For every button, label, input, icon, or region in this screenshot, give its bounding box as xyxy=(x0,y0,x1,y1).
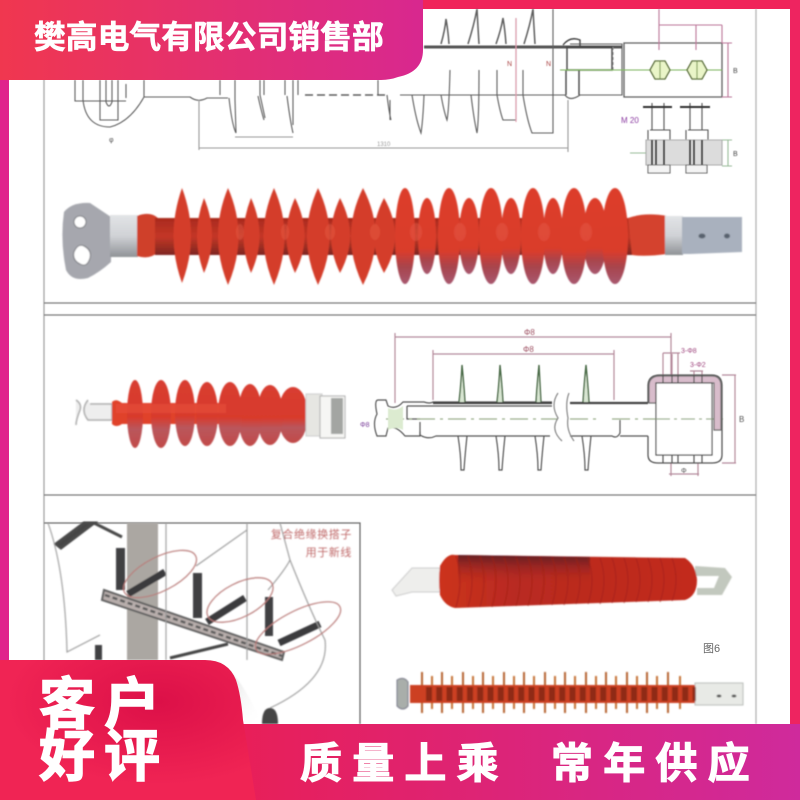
top shading xyxy=(458,555,590,585)
metal end xyxy=(695,683,743,705)
angled insulators xyxy=(128,572,320,643)
field installation photo: 用于新线 xyxy=(306,545,352,559)
bottom slogan left: 质量上乘 xyxy=(300,740,509,787)
shaft xyxy=(155,218,635,255)
technical drawing: middle insulator: 3-Φ2 xyxy=(690,362,706,369)
utility pole xyxy=(127,523,158,660)
centre line xyxy=(386,418,725,420)
top banner xyxy=(0,0,423,80)
field installation photo xyxy=(48,523,352,724)
technical drawing: middle insulator: Φ8 xyxy=(524,328,535,337)
sheds on the left half xyxy=(174,188,395,285)
end ball xyxy=(374,400,552,436)
customer praise badge xyxy=(0,660,256,800)
shaft outline xyxy=(144,80,298,133)
red loops xyxy=(117,541,348,664)
right collar xyxy=(628,214,667,256)
weather sheds xyxy=(174,188,628,285)
right fitting xyxy=(695,566,732,595)
technical drawing: top insulator xyxy=(75,9,738,173)
section with bolts xyxy=(648,103,708,140)
bottom slogan right: 常年供应 xyxy=(551,740,760,787)
left fitting xyxy=(392,568,440,596)
metal eye plate xyxy=(62,203,111,279)
metal neck xyxy=(110,215,138,257)
red shaft xyxy=(112,400,300,426)
technical drawing: top insulator: M 20 xyxy=(621,116,639,125)
left eye fitting xyxy=(83,80,144,127)
technical drawing: top insulator: B xyxy=(733,68,738,75)
bottom banner xyxy=(240,724,800,800)
dimension lines xyxy=(395,333,671,403)
technical drawing: middle insulator: Φ8 xyxy=(360,422,370,429)
brace xyxy=(170,644,228,658)
left cap xyxy=(397,678,408,709)
right fitting xyxy=(306,394,322,436)
technical drawing: top insulator: N xyxy=(507,61,512,68)
technical drawing: middle insulator: Φ8 xyxy=(523,345,534,354)
sheds xyxy=(422,672,668,713)
vertical insulators xyxy=(95,548,273,660)
large red insulator xyxy=(62,188,742,285)
metal flat end xyxy=(682,217,742,254)
left fitting xyxy=(76,400,112,425)
technical drawing: middle insulator: 3-Φ8 xyxy=(681,348,697,355)
middle photo insulator xyxy=(76,380,345,448)
jumper wires xyxy=(48,523,325,708)
shaft xyxy=(410,685,695,703)
technical drawing: top insulator: B xyxy=(733,151,738,158)
customer praise badge: 好评 xyxy=(39,725,169,788)
technical drawing: middle insulator xyxy=(360,328,744,476)
shaft highlight xyxy=(116,404,226,413)
company name: 樊高电气有限公司销售部 xyxy=(34,19,384,55)
slim red insulator xyxy=(397,672,743,713)
left collar xyxy=(137,214,158,257)
bottom fitting xyxy=(262,708,278,724)
technical drawing: top insulator: φ xyxy=(109,137,114,144)
technical drawing: middle insulator: Φ xyxy=(681,468,687,475)
upper steel arm xyxy=(56,523,122,548)
banner shadow xyxy=(215,660,262,724)
label: 复合绝缘换搭子 xyxy=(271,527,352,541)
lower fins xyxy=(458,436,591,470)
red body xyxy=(439,555,697,608)
shed highlights xyxy=(236,223,592,241)
ribs xyxy=(456,556,676,607)
fat red insulator xyxy=(392,555,732,608)
panel frame lines xyxy=(44,9,756,724)
shaft dark bands xyxy=(426,687,696,701)
cross arm truss xyxy=(102,590,284,660)
left end green fill xyxy=(388,406,403,430)
sheds on the right half xyxy=(395,188,628,284)
bolted plate xyxy=(624,43,722,97)
sheds xyxy=(127,380,308,448)
metal sleeve xyxy=(665,216,683,255)
clevis box xyxy=(648,375,722,463)
technical drawing: middle insulator: B xyxy=(739,415,744,424)
technical drawing: top insulator: 1310 xyxy=(377,142,391,148)
technical drawing: top insulator: N xyxy=(546,61,551,68)
badge text: 客户 xyxy=(39,673,169,736)
upper fins xyxy=(459,365,589,402)
figure label: 图6 xyxy=(703,642,720,655)
